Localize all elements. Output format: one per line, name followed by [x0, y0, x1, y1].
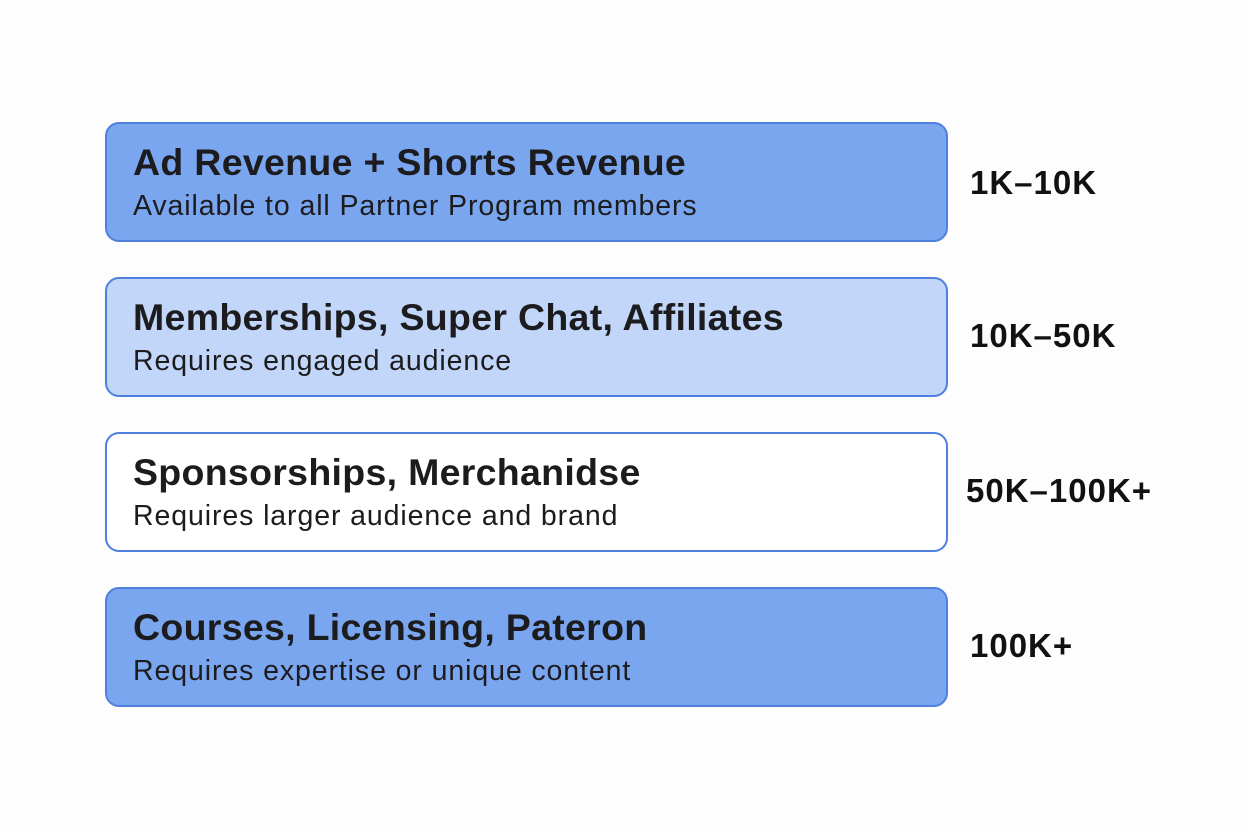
label: 50K-100K+: 50K–100K+: [966, 472, 1152, 509]
panel: ad revenue: [105, 122, 948, 242]
text block: Requires engaged audience: [133, 345, 512, 377]
text block: Requires expertise or unique content: [133, 655, 631, 687]
text block: Available to all Partner Program members: [133, 190, 698, 222]
panel: sponsorships: [105, 432, 948, 552]
heading: Sponsorships, Merchanidse: [133, 451, 641, 493]
heading: Courses, Licensing, Pateron: [133, 606, 647, 648]
label: 1K-10K: 1K–10K: [970, 164, 1097, 201]
text block: Requires larger audience and brand: [133, 500, 618, 532]
label: 10K-50K: 10K–50K: [970, 317, 1116, 354]
heading: Ad Revenue + Shorts Revenue: [133, 141, 686, 183]
label: 100K+: 100K+: [970, 627, 1073, 664]
heading: Memberships, Super Chat, Affiliates: [133, 296, 784, 338]
panel: courses: [105, 587, 948, 707]
panel: memberships: [105, 277, 948, 397]
